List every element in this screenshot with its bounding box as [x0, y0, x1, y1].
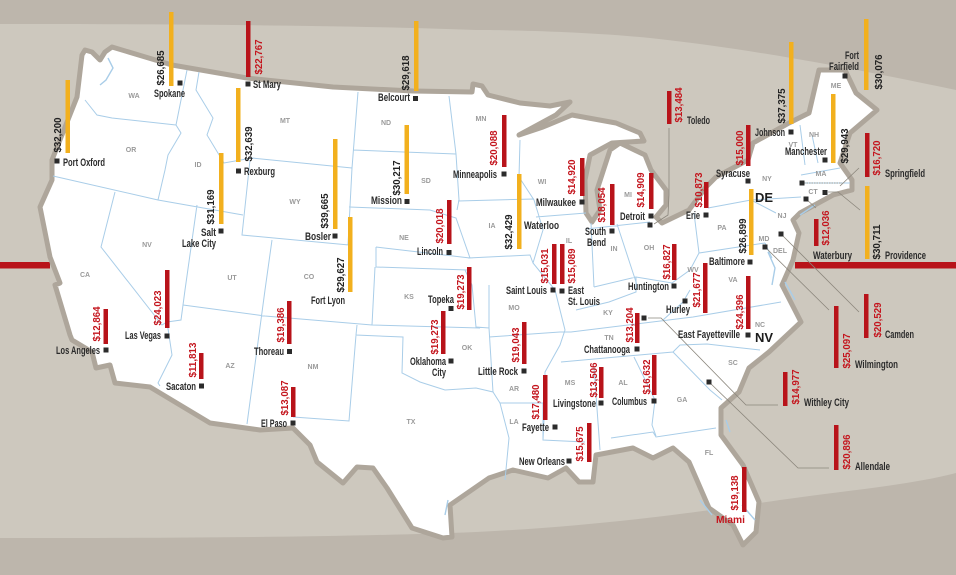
NV: NV — [755, 330, 773, 345]
state abbreviations: NM — [308, 364, 319, 371]
Rexburg: Rexburg — [244, 166, 275, 178]
state abbreviations: PA — [717, 225, 727, 232]
Camden — [762, 244, 914, 341]
state abbreviations: NV — [142, 242, 152, 249]
Johnson: Johnson — [755, 127, 785, 139]
Miami: $19,138 — [729, 475, 741, 510]
state abbreviations: UT — [227, 275, 237, 282]
state abbreviations: FL — [705, 450, 714, 457]
state abbreviations: NC — [755, 322, 765, 329]
state abbreviations: IN — [610, 246, 618, 253]
Little Rock: $19,043 — [510, 327, 522, 362]
St Mary — [246, 21, 282, 91]
state abbreviations: MN — [476, 116, 486, 123]
Oklahoma City: $19,273 — [429, 319, 441, 354]
Oklahoma City: City — [432, 367, 447, 379]
Springfield — [800, 133, 925, 186]
Syracuse: Syracuse — [716, 168, 750, 180]
Providence — [822, 186, 926, 262]
Johnson: $37,375 — [776, 88, 788, 124]
Waterloo — [503, 174, 559, 250]
East Fayetteville: $24,396 — [734, 294, 746, 330]
South Bend — [585, 184, 614, 249]
Waterbury: $12,036 — [820, 210, 832, 246]
state abbreviations: MD — [759, 236, 769, 243]
Wilmington — [778, 232, 898, 371]
Fayette — [522, 375, 558, 434]
Rexburg — [236, 88, 275, 178]
Las Vegas: Las Vegas — [125, 330, 161, 342]
state abbreviations: IA — [488, 223, 496, 230]
state abbreviations: AR — [509, 386, 519, 393]
state abbreviations: VT — [789, 142, 798, 149]
state abbreviations: MS — [565, 380, 576, 387]
Topeka — [428, 267, 472, 311]
Waterloo: $32,429 — [503, 214, 515, 250]
state abbreviations: AZ — [225, 363, 235, 370]
Waterbury — [804, 196, 853, 262]
Salt Lake City — [182, 153, 224, 250]
state abbreviations: OK — [462, 345, 472, 352]
Hurley: $21,677 — [691, 272, 703, 308]
Spokane: $26,685 — [155, 50, 167, 86]
Oklahoma City: Oklahoma — [410, 356, 447, 368]
Waterbury: Waterbury — [813, 250, 853, 262]
St Mary: $22,767 — [253, 39, 265, 74]
Springfield: Springfield — [885, 168, 925, 180]
Minneapolis — [453, 115, 506, 181]
Topeka: Topeka — [428, 294, 455, 306]
Saint Louis — [506, 244, 556, 297]
state abbreviations: ND — [381, 120, 391, 127]
Thoreau: Thoreau — [254, 346, 284, 358]
Fort Fairfield — [829, 19, 885, 90]
Wilmington: Wilmington — [855, 359, 898, 371]
Huntington: Huntington — [628, 281, 669, 293]
East St. Louis: $15,089 — [566, 248, 578, 284]
Fort Lyon: $29,627 — [335, 257, 347, 292]
state abbreviations: NE — [399, 235, 409, 242]
New Orleans — [519, 423, 592, 468]
Syracuse — [716, 125, 750, 184]
state abbreviations: ME — [831, 83, 842, 90]
DE: DE — [755, 190, 773, 205]
state abbreviations: WA — [128, 93, 140, 100]
Sacaton — [166, 342, 204, 393]
Detroit — [620, 172, 654, 223]
Allendale: Allendale — [855, 461, 890, 473]
South Bend: $18,054 — [596, 187, 608, 222]
East St. Louis: St. Louis — [568, 296, 600, 308]
Belcourt: $29,618 — [400, 55, 412, 90]
Allendale — [706, 380, 890, 473]
Allendale: $20,896 — [841, 434, 853, 470]
Little Rock — [478, 322, 526, 378]
state abbreviations: SC — [728, 360, 738, 367]
map of the United States — [40, 47, 877, 545]
Hurley — [666, 263, 708, 316]
Little Rock: Little Rock — [478, 366, 519, 378]
Los Angeles: Los Angeles — [56, 345, 100, 357]
Fort Lyon: Fort Lyon — [311, 295, 345, 307]
Withley City — [642, 316, 850, 409]
Thoreau — [254, 301, 292, 358]
Fayette: Fayette — [522, 422, 549, 434]
Chattanooga — [584, 307, 640, 356]
state abbreviations: NJ — [778, 213, 787, 220]
state abbreviations: NY — [762, 176, 772, 183]
state abbreviations: TX — [407, 419, 416, 426]
Mission — [371, 125, 410, 207]
Los Angeles — [56, 306, 108, 357]
Sacaton: Sacaton — [166, 381, 196, 393]
Las Vegas — [125, 270, 170, 342]
Lincoln — [417, 200, 452, 258]
state abbreviations: IL — [566, 238, 573, 245]
state abbreviations: WY — [289, 199, 301, 206]
Livingstone: $13,506 — [588, 362, 600, 398]
state abbreviations: OR — [126, 147, 136, 154]
red equator band: right — [795, 262, 956, 268]
state abbreviations: MO — [508, 305, 520, 312]
South Bend: South — [585, 226, 606, 238]
Livingstone: Livingstone — [553, 398, 596, 410]
Spokane — [154, 12, 185, 100]
Mission: Mission — [371, 195, 402, 207]
Providence: Providence — [885, 250, 926, 262]
Manchester: $29,943 — [839, 128, 851, 164]
Minneapolis: $20,088 — [488, 130, 500, 166]
Milwaukee: $14,920 — [566, 159, 578, 194]
Baltimore: Baltimore — [709, 256, 745, 268]
Chattanooga: $13,204 — [624, 307, 636, 342]
Toledo — [648, 87, 710, 228]
state abbreviations: MT — [280, 118, 291, 125]
Milwaukee: Milwaukee — [536, 197, 576, 209]
Livingstone — [553, 362, 604, 410]
state abbreviations: WV — [687, 267, 699, 274]
Huntington — [628, 244, 676, 293]
state borders — [53, 58, 850, 520]
state abbreviations: DEL — [773, 248, 788, 255]
East St. Louis: East — [568, 285, 584, 297]
Sacaton: $11,813 — [187, 342, 199, 378]
Fort Fairfield: Fairfield — [829, 61, 859, 73]
Columbus — [612, 355, 656, 408]
Bosler: Bosler — [305, 231, 332, 243]
Salt Lake City: Lake City — [182, 238, 217, 250]
Baltimore: $26,899 — [737, 218, 749, 254]
Johnson — [755, 42, 794, 139]
state abbreviations: SD — [421, 178, 431, 185]
East Fayetteville: East Fayetteville — [678, 329, 740, 341]
El Paso — [261, 380, 296, 430]
Topeka: $19,273 — [455, 274, 467, 310]
state abbreviations: LA — [509, 419, 519, 426]
Port Oxford: $32,200 — [52, 117, 64, 152]
Erie — [686, 172, 708, 222]
New Orleans: New Orleans — [519, 456, 565, 468]
Fort Lyon — [311, 217, 352, 307]
red equator band: left — [0, 262, 50, 268]
state abbreviations — [80, 83, 842, 457]
state abbreviations: MA — [816, 171, 826, 178]
Hurley: Hurley — [666, 304, 691, 316]
Erie: $10,873 — [693, 172, 705, 208]
Manchester — [785, 94, 851, 164]
Milwaukee — [536, 158, 584, 209]
state abbreviations: KS — [404, 294, 414, 301]
Belcourt — [378, 21, 418, 104]
Withley City: Withley City — [804, 397, 850, 409]
Columbus: Columbus — [612, 396, 647, 408]
state abbreviations: NH — [809, 132, 819, 139]
Wilmington: $25,097 — [841, 333, 853, 368]
Minneapolis: Minneapolis — [453, 169, 497, 181]
state abbreviations: OH — [644, 245, 654, 252]
Port Oxford: Port Oxford — [63, 157, 105, 169]
state abbreviations: MI — [624, 192, 632, 199]
Camden: Camden — [885, 329, 914, 341]
Oklahoma City — [410, 311, 454, 379]
state abbreviations: CA — [80, 272, 90, 279]
Detroit: $14,909 — [635, 172, 647, 208]
state abbreviations: AL — [618, 380, 628, 387]
Spokane: Spokane — [154, 88, 185, 100]
Withley City: $14,977 — [790, 369, 802, 404]
East St. Louis — [560, 244, 600, 308]
Salt Lake City: Salt — [201, 227, 216, 239]
Miami — [716, 467, 746, 526]
Los Angeles: $12,864 — [91, 306, 103, 342]
El Paso: El Paso — [261, 418, 287, 430]
Lincoln: Lincoln — [417, 246, 443, 258]
East Fayetteville — [678, 276, 750, 341]
state abbreviations: GA — [677, 397, 687, 404]
Toledo: Toledo — [687, 115, 710, 127]
Columbus: $16,632 — [641, 359, 653, 394]
state abbreviations: WI — [538, 179, 546, 186]
Mission: $30,217 — [391, 160, 403, 196]
Detroit: Detroit — [620, 211, 645, 223]
Bosler — [305, 139, 338, 243]
Baltimore — [709, 189, 754, 268]
Bosler: $39,665 — [319, 193, 331, 228]
Las Vegas: $24,023 — [152, 290, 164, 326]
Rexburg: $32,639 — [243, 126, 255, 162]
Saint Louis: $15,031 — [539, 248, 551, 284]
Fayette: $17,480 — [530, 384, 542, 420]
Fort Fairfield: Fort — [845, 50, 859, 62]
Springfield: $16,720 — [871, 140, 883, 176]
Manchester: Manchester — [785, 146, 827, 158]
Thoreau: $19,386 — [275, 307, 287, 342]
South Bend: Bend — [587, 237, 606, 249]
Port Oxford — [52, 80, 105, 169]
Chattanooga: Chattanooga — [584, 344, 631, 356]
state abbreviations: VA — [728, 277, 738, 284]
state abbreviations: KY — [603, 310, 613, 317]
state abbreviations: TN — [604, 335, 614, 342]
New Orleans: $15,675 — [574, 426, 586, 462]
Camden: $20,529 — [872, 302, 884, 338]
Huntington: $16,827 — [661, 244, 673, 280]
Fort Fairfield: $30,076 — [873, 54, 885, 90]
El Paso: $13,087 — [279, 380, 291, 416]
state abbreviations: CO — [304, 274, 315, 281]
Waterloo: Waterloo — [524, 220, 559, 232]
Saint Louis: Saint Louis — [506, 285, 547, 297]
St Mary: St Mary — [253, 79, 282, 91]
Lincoln: $20,018 — [434, 208, 446, 244]
state abbreviations: CT — [808, 189, 818, 196]
Toledo: $13,484 — [673, 87, 685, 122]
Erie: Erie — [686, 210, 700, 222]
Miami: Miami — [716, 515, 745, 526]
Providence: $30,711 — [871, 224, 883, 260]
Syracuse: $15,000 — [734, 130, 746, 166]
Salt Lake City: $31,169 — [205, 189, 217, 224]
state abbreviations: ID — [194, 162, 202, 169]
Belcourt: Belcourt — [378, 92, 410, 104]
leader lines — [648, 128, 860, 468]
